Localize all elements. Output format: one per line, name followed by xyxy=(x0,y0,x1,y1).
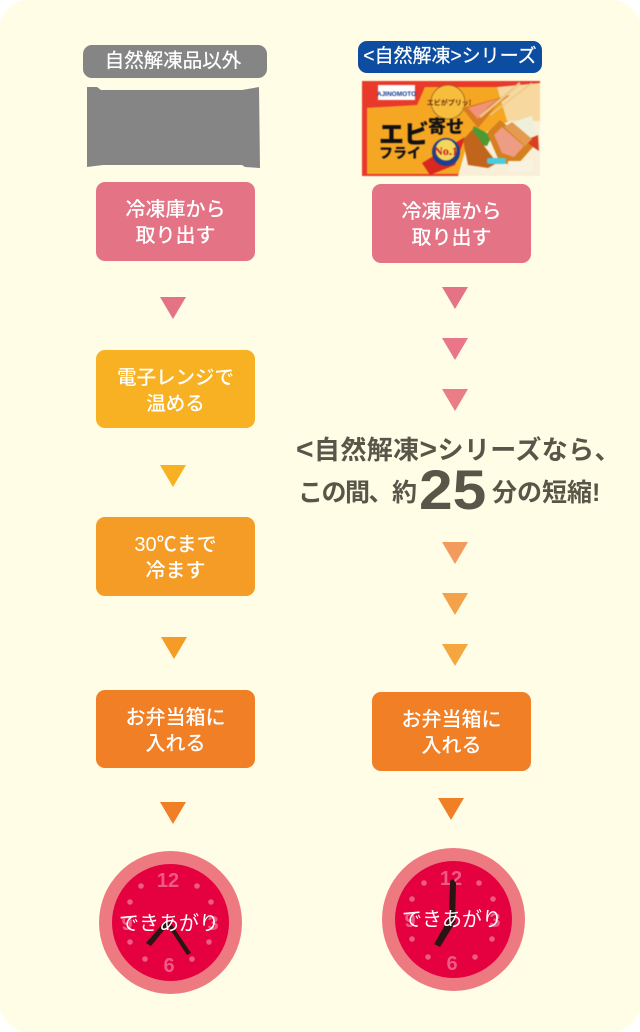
product package: shrimp fry: No.1 xyxy=(434,144,458,158)
left flow: step 1: 冷凍庫から xyxy=(126,199,226,221)
left clock: finished: 9 xyxy=(121,913,133,935)
arrow xyxy=(160,297,186,319)
left flow: step 3: 冷ます xyxy=(146,560,206,582)
left clock: finished: 6 xyxy=(163,955,175,977)
left flow: step 4: 入れる xyxy=(146,732,206,754)
left flow: step 2 xyxy=(96,350,255,428)
right clock: finished xyxy=(382,848,525,991)
left flow: step 4 xyxy=(96,690,255,768)
callout: 25 minutes shorter: 25 xyxy=(419,458,486,521)
heading: non-natural-thaw products xyxy=(83,45,267,78)
arrow xyxy=(160,802,186,824)
right flow: step 2 xyxy=(372,692,531,771)
arrow xyxy=(160,465,186,487)
product package: shrimp fry: AJINOMOTO xyxy=(377,91,416,98)
right flow: step 1: 取り出す xyxy=(412,227,492,249)
right clock: finished: できあがり xyxy=(402,903,502,932)
heading: natural-thaw series: <自然解凍>シリーズ xyxy=(363,46,537,67)
left clock: finished: できあがり xyxy=(119,907,219,936)
right flow: step 1: 冷凍庫から xyxy=(402,201,502,223)
right clock: finished: 3 xyxy=(489,910,501,932)
callout: 25 minutes shorter: 分の短縮! xyxy=(492,479,600,507)
left clock: finished: 12 xyxy=(157,870,179,892)
right flow: step 2: 入れる xyxy=(422,735,482,757)
arrow xyxy=(442,338,468,360)
heading: natural-thaw series xyxy=(358,41,542,73)
left clock: finished xyxy=(99,851,242,994)
product package: shrimp fry: エビ xyxy=(379,115,429,151)
callout: 25 minutes shorter xyxy=(296,433,621,521)
arrow xyxy=(442,542,468,564)
left flow: step 1: 取り出す xyxy=(136,225,216,247)
left flow: step 4: お弁当箱に xyxy=(126,706,226,728)
callout: 25 minutes shorter: この間、約 xyxy=(298,479,416,507)
left flow: step 1 xyxy=(96,182,255,261)
left flow: step 3 xyxy=(96,517,255,596)
callout: 25 minutes shorter: <自然解凍>シリーズなら、 xyxy=(296,433,621,466)
arrow xyxy=(438,798,464,820)
product package: shrimp fry: フライ xyxy=(379,143,421,163)
icon: grey package silhouette xyxy=(87,87,260,168)
left flow: step 2: 電子レンジで xyxy=(117,366,234,388)
left clock: finished: 3 xyxy=(207,913,219,935)
arrow xyxy=(442,389,468,411)
left flow: step 2: 温める xyxy=(146,392,205,414)
arrow xyxy=(442,644,468,666)
heading: non-natural-thaw products: 自然解凍品以外 xyxy=(105,50,241,72)
arrow xyxy=(161,637,187,659)
product package: shrimp fry xyxy=(361,80,541,177)
arrow xyxy=(442,287,468,309)
arrow xyxy=(442,593,468,615)
right flow: step 2: お弁当箱に xyxy=(402,709,502,731)
product package: shrimp fry: エビがプリッ! xyxy=(427,98,471,108)
product package: shrimp fry: 寄せ xyxy=(428,113,464,139)
right clock: finished: 12 xyxy=(440,868,462,890)
right clock: finished: 9 xyxy=(404,910,416,932)
right clock: finished: 6 xyxy=(446,953,458,975)
right flow: step 1 xyxy=(372,184,531,263)
left flow: step 3: 30℃まで xyxy=(134,534,217,556)
